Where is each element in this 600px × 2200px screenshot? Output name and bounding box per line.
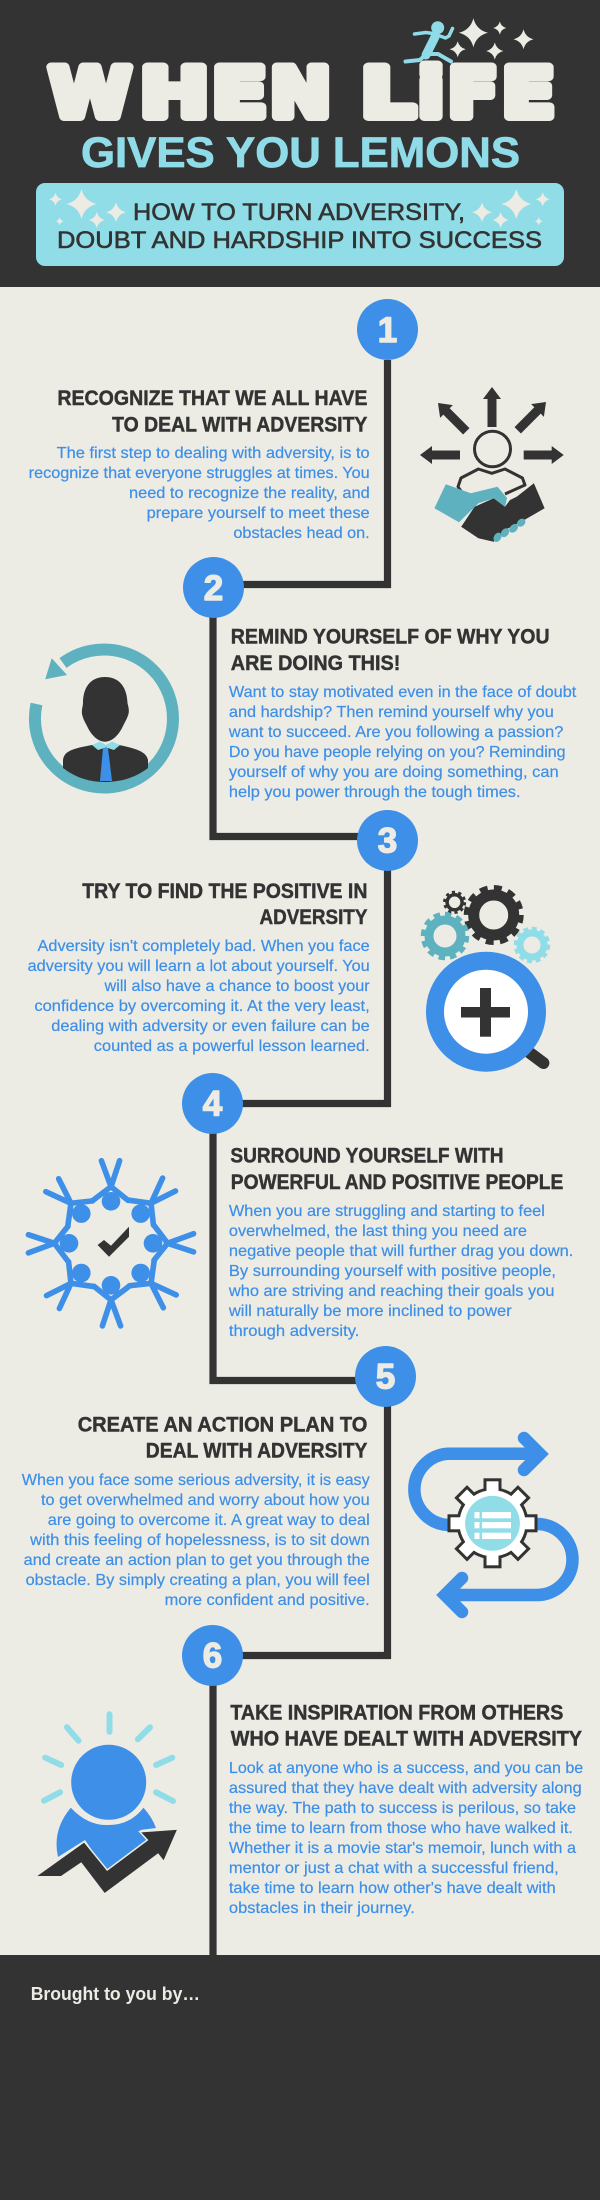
tagline text [57,199,542,254]
step 3 badge: 3 [378,821,397,860]
step 6 body text: the way. The path to success is perilous, so take [229,1800,576,1817]
step 2 body text: Want to stay motivated even in the face of doubt [229,684,577,701]
timeline connector [213,360,388,1956]
icon: handshake with arrows [420,387,564,543]
step 4 body text: will naturally be more inclined to power [228,1303,512,1320]
step 6 body text: Whether it is a movie star's memoir, lunch with a [229,1840,576,1857]
step 2 body text: yourself of why you are doing something, can [229,764,559,781]
step 5 body text: When you face some serious adversity, it is easy [22,1472,370,1489]
header panel [0,0,600,287]
title: when life: L [361,54,415,134]
step 1 badge: 1 [378,311,397,350]
step 3 body text: will also have a chance to boost your [103,978,370,995]
step 6 heading [230,1701,582,1751]
step 4 heading: SURROUND YOURSELF WITH [230,1145,504,1168]
step 2 body text: and hardship? Then remind yourself why you [229,704,554,721]
step 1 heading: TO DEAL WITH ADVERSITY [112,413,367,436]
step 6 body text: assured that they have dealt with adversity along [229,1780,582,1797]
footer credit: Brought to you by… [31,1984,200,2004]
title: when life: i [418,54,444,134]
step 4 body text: negative people that will further drag you down. [229,1243,573,1260]
step 3 heading: ADVERSITY [260,906,367,929]
icon: header stars [450,18,534,60]
step 5 heading: CREATE AN ACTION PLAN TO [78,1414,367,1437]
step 1 body text: prepare yourself to meet these [147,505,370,522]
step 4 body text [228,1203,573,1340]
main cream panel [0,287,600,1955]
title: when life: F [448,54,498,134]
step 5 badge [355,1346,416,1407]
step 6 body text: take time to learn how other's have dealt with [229,1880,556,1897]
step 3 heading: TRY TO FIND THE POSITIVE IN [82,880,367,903]
step 5 heading [78,1414,367,1463]
step 4 heading [230,1145,563,1194]
step 3 body text: dealing with adversity or even failure can be [51,1018,370,1035]
step 6 body text: mentor or just a chat with a successful friend, [229,1860,559,1877]
icon: gears and magnifying glass [423,888,548,1072]
title: when life [49,54,555,134]
step 2 badge [183,557,244,618]
step 6 heading: WHO HAVE DEALT WITH ADVERSITY [231,1728,582,1751]
step 6 heading: TAKE INSPIRATION FROM OTHERS [230,1701,563,1724]
step 4 badge [182,1073,243,1134]
step 1 heading [57,387,367,436]
step 4 heading: POWERFUL AND POSITIVE PEOPLE [231,1171,563,1194]
icon: banner stars [49,189,550,228]
title: when life: N [270,54,331,134]
tagline banner [36,183,564,266]
step 3 badge [357,810,418,871]
step 6 body text: Look at anyone who is a success, and you can be [229,1760,583,1777]
title: when life: E [212,54,267,134]
step 4 badge: 4 [203,1085,223,1124]
step 4 body text: When you are struggling and starting to feel [229,1203,545,1220]
step 1 body text: recognize that everyone struggles at times. You [29,465,370,482]
step 1 heading: RECOGNIZE THAT WE ALL HAVE [57,387,367,410]
step 3 body text: Adversity isn't completely bad. When you face [38,938,370,955]
step 3 heading [82,880,367,929]
step 2 badge: 2 [204,569,223,608]
step 3 body text: adversity you will learn a lot about yourself. You [28,958,370,975]
step 6 body text [229,1760,583,1917]
icon: inspired person with rising arrow [35,1714,178,1894]
step 5 body text: to get overwhelmed and worry about how you [41,1492,370,1509]
tagline text: HOW TO TURN ADVERSITY, [133,199,465,226]
step 5 body text: with this feeling of hopelessness, is to sit down [29,1532,370,1549]
step 6 body text: the time to learn from those who have walked it. [229,1820,573,1837]
step 3 body text: counted as a powerful lesson learned. [94,1038,370,1055]
step 4 body text: overwhelmed, the last thing you need are [229,1223,527,1240]
footer panel [0,1955,600,2200]
step 2 heading [231,625,550,675]
step 1 body text [29,445,370,542]
step 5 body text: and create an action plan to get you through the [24,1552,370,1569]
step 4 body text: through adversity. [229,1323,359,1340]
step 5 body text: obstacle. By simply creating a plan, you will feel [26,1572,370,1589]
subtitle: gives you lemons: GIVES YOU LEMONS [81,129,520,177]
step 2 heading: REMIND YOURSELF OF WHY YOU [231,625,550,648]
step 1 body text: obstacles head on. [233,525,370,542]
step 2 body text: want to succeed. Are you following a passion? [228,724,563,741]
step 4 body text: By surrounding yourself with positive people, [229,1263,556,1280]
title: when life: H [140,54,209,134]
step 2 heading: ARE DOING THIS! [231,652,400,675]
step 2 body text [228,684,577,801]
step 5 heading: DEAL WITH ADVERSITY [146,1440,367,1463]
step 6 body text: obstacles in their journey. [229,1900,415,1917]
icon: businessman in circular arrow [35,650,173,788]
step 1 badge [357,299,418,360]
icon: process arrows with gear [414,1438,572,1612]
step 3 body text: confidence by overcoming it. At the very least, [34,998,370,1015]
step 1 body text: need to recognize the reality, and [129,485,370,502]
step 5 body text: more confident and positive. [165,1592,370,1609]
step 5 body text [22,1472,370,1609]
step 5 badge: 5 [376,1358,395,1397]
step 2 body text: Do you have people relying on you? Reminding [229,744,566,761]
title: when life: W [49,54,131,134]
step 1 body text: The first step to dealing with adversity, is to [57,445,370,462]
step 4 body text: who are striving and reaching their goals you [228,1283,555,1300]
tagline text: DOUBT AND HARDSHIP INTO SUCCESS [57,227,542,254]
step 6 badge: 6 [203,1637,222,1676]
step 2 body text: help you power through the tough times. [229,784,520,801]
step 3 body text [28,938,370,1055]
title: when life: E [502,54,555,134]
icon: running figure [406,21,452,62]
step 6 badge [182,1625,243,1686]
icon: ring of people with check mark [28,1161,194,1326]
step 5 body text: are going to overcome it. A great way to deal [48,1512,370,1529]
